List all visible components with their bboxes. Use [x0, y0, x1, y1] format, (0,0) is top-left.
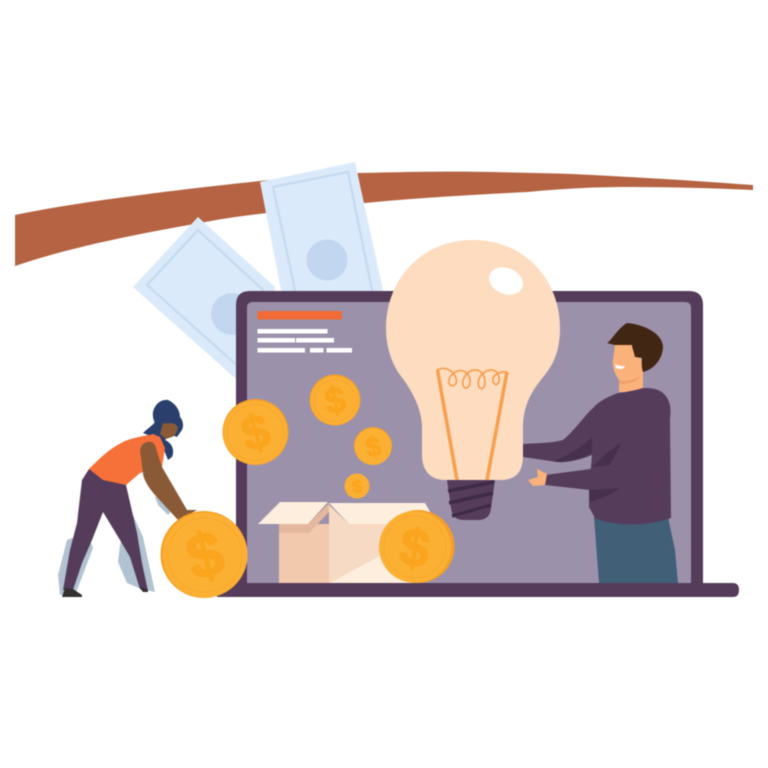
neck shadow: [619, 376, 640, 384]
coin: large being pushed: [160, 511, 248, 598]
head: [153, 400, 183, 439]
sweater shadows: [553, 437, 622, 502]
banknote: left: [133, 217, 275, 380]
banknote: upper: [260, 162, 384, 295]
screen text lines: [258, 311, 352, 352]
bulb socket: [447, 480, 495, 520]
neck and face: [613, 345, 643, 392]
box inner light panel: [330, 553, 420, 583]
bulb glass: [386, 240, 560, 480]
trousers: [594, 517, 678, 583]
arm: [140, 442, 197, 520]
coin: small: $: [350, 476, 364, 497]
hair: [607, 323, 663, 372]
coin: middle right: [354, 427, 392, 465]
laptop base: [217, 583, 739, 597]
box left face: [279, 524, 329, 583]
ground shadow behind legs: [58, 495, 172, 595]
box right face: [329, 505, 430, 583]
mouth: [615, 364, 625, 369]
coin: large being pushed: $: [179, 518, 231, 594]
brown swoosh: [15, 172, 753, 266]
coin: middle right: $: [363, 431, 383, 463]
laptop: [217, 291, 739, 597]
cardboard box: [258, 502, 437, 583]
coin: in front of box: $: [396, 517, 433, 580]
box right flap: [329, 503, 437, 524]
bulb highlight: [485, 262, 527, 300]
box left flap: [258, 502, 328, 524]
coin: small: [344, 474, 370, 498]
coin: left on laptop edge: [222, 399, 288, 465]
sweater: [523, 388, 671, 524]
shirt: [89, 434, 165, 485]
man holding bulb: [523, 323, 678, 583]
coin: left on laptop edge: $: [236, 404, 276, 462]
hair tail: [143, 422, 173, 460]
coin: upper middle: [310, 374, 360, 426]
coin: upper middle: $: [321, 378, 349, 422]
woman pushing coin: [58, 400, 197, 597]
legs: [63, 469, 148, 591]
light bulb: [386, 240, 560, 520]
bulb filament: [437, 368, 507, 480]
laptop screen: [247, 302, 691, 584]
hand: [528, 469, 547, 486]
coin: in front of box: [379, 510, 454, 583]
box flap shadow: [279, 503, 329, 533]
shoes: [62, 587, 148, 597]
front arm: [545, 466, 620, 490]
laptop frame: [236, 291, 703, 583]
